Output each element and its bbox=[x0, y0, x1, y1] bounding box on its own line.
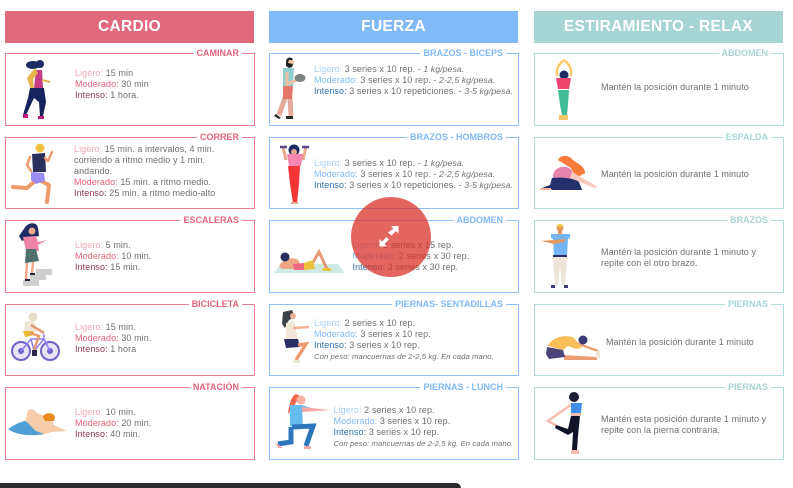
text: correr: Ligero: 15 min. a intervalos, 4 min. bbox=[74, 144, 214, 154]
column: estiramiento relax bbox=[534, 11, 784, 460]
text: piernas lunch: Intenso: 3 series x 10 rep. bbox=[334, 426, 439, 436]
text: natacion: Moderado: 20 min. bbox=[75, 418, 151, 428]
text: correr: Moderado: 15 min. a ritmo medio. bbox=[74, 176, 211, 186]
text: bicicleta bbox=[75, 322, 151, 354]
icon: woman with dumbbells bbox=[280, 144, 309, 204]
text: piernas relax 2: Mantén esta posición durante 1 minuto y bbox=[601, 414, 766, 424]
heading: fuerza bbox=[269, 11, 518, 43]
panel: correr bbox=[5, 137, 255, 209]
icon: cyclist bbox=[11, 312, 60, 361]
panel: brazos hombros bbox=[269, 137, 519, 209]
text: natacion: Ligero: 10 min. bbox=[75, 406, 136, 416]
text: piernas lunch: Con peso: mancuernas de 2-2,5 kg. En cada mano. bbox=[334, 438, 513, 448]
panel: abdomen relax bbox=[534, 53, 784, 126]
text: piernas sentadillas: Con peso: mancuernas de 2-2,5 kg. En cada mano. bbox=[314, 352, 494, 360]
panel: abdomen fuerza bbox=[269, 220, 519, 293]
panel: espalda bbox=[534, 137, 784, 209]
text: caminar: Intenso: 1 hora. bbox=[75, 90, 139, 100]
icon: man running bbox=[11, 144, 54, 204]
text: piernas relax 2: repite con la pierna contraria. bbox=[601, 424, 720, 434]
icon: woman walking bbox=[23, 60, 50, 119]
panel: natacion bbox=[5, 387, 255, 460]
label: natacion: NATACIÓN bbox=[193, 382, 239, 392]
text: piernas sentadillas: Intenso: 3 series x 10 rep. bbox=[314, 340, 420, 350]
text: piernas sentadillas: Moderado: 3 series x 10 rep. bbox=[314, 328, 431, 338]
icon: man stretching arm bbox=[541, 224, 570, 288]
text: abdomen fuerza: Ligero: 2 series x 15 rep. bbox=[352, 240, 454, 250]
icon: woman squatting bbox=[282, 310, 310, 363]
text: brazos relax bbox=[601, 246, 756, 268]
text: brazos biceps: Moderado: 3 series x 10 rep. - 2-2,5 kg/pesa. bbox=[314, 74, 495, 84]
text: brazos hombros: Intenso: 3 series x 10 repeticiones. - 3-5 kg/pesa. bbox=[314, 180, 513, 190]
text: caminar: Ligero: 15 min bbox=[75, 68, 133, 78]
heading: cardio: CARDIO bbox=[98, 18, 161, 35]
text: escaleras: Intenso: 15 min. bbox=[75, 262, 140, 272]
text: correr bbox=[74, 144, 215, 198]
panel: escaleras bbox=[5, 220, 255, 293]
text: bicicleta: Intenso: 1 hora bbox=[75, 344, 136, 354]
text: piernas lunch: Ligero: 2 series x 10 rep. bbox=[334, 404, 435, 414]
text: brazos hombros: Ligero: 3 series x 10 rep. - 1 kg/pesa. bbox=[314, 158, 464, 168]
text: brazos biceps bbox=[314, 64, 513, 96]
icon: woman lunging bbox=[275, 394, 330, 449]
icon: seated forward bend bbox=[546, 336, 600, 360]
text: natacion: Intenso: 40 min. bbox=[75, 428, 140, 438]
label: caminar: CAMINAR bbox=[196, 48, 239, 58]
label: escaleras: ESCALERAS bbox=[183, 215, 239, 225]
text: correr: corriendo a ritmo medio y 1 min. bbox=[74, 154, 205, 164]
icon: swimmer bbox=[8, 409, 67, 436]
heading: cardio bbox=[5, 11, 254, 43]
text: abdomen fuerza: Moderado: 2 series x 30 rep. bbox=[352, 250, 469, 260]
icon: woman on stairs bbox=[19, 223, 52, 286]
heading: estiramiento relax: ESTIRAMIENTO - RELAX bbox=[564, 18, 753, 35]
label: brazos biceps: BRAZOS - BICEPS bbox=[423, 48, 503, 58]
label: bicicleta: BICICLETA bbox=[192, 299, 239, 309]
label: piernas lunch: PIERNAS - LUNCH bbox=[423, 382, 503, 392]
text: escaleras: Ligero: 5 min. bbox=[75, 240, 131, 250]
text: abdomen fuerza: Intenso: 3 series x 30 rep. bbox=[352, 262, 458, 272]
text: espalda: Mantén la posición durante 1 minuto bbox=[601, 168, 749, 178]
panel: bicicleta bbox=[5, 304, 255, 376]
panel: brazos biceps bbox=[269, 53, 519, 126]
text: bicicleta: Moderado: 30 min. bbox=[75, 332, 151, 342]
panel: piernas sentadillas bbox=[269, 304, 519, 376]
label: abdomen relax: ABDOMEN bbox=[722, 48, 768, 58]
text: piernas sentadillas bbox=[314, 318, 494, 360]
bottom bar bbox=[0, 483, 461, 488]
column: fuerza bbox=[269, 11, 519, 460]
text: piernas lunch bbox=[334, 404, 513, 448]
panel: piernas relax 1 bbox=[534, 304, 784, 376]
icon: child pose bbox=[540, 156, 598, 190]
text: brazos hombros: Moderado: 3 series x 10 rep. - 2-2,5 kg/pesa. bbox=[314, 168, 495, 178]
panel: piernas relax 2 bbox=[534, 387, 784, 460]
label: correr: CORRER bbox=[200, 132, 239, 142]
text: brazos relax: repite con el otro brazo. bbox=[601, 258, 698, 268]
icon: man with weight bbox=[274, 58, 306, 119]
label: brazos relax: BRAZOS bbox=[730, 215, 768, 225]
panel: piernas lunch bbox=[269, 387, 519, 460]
text: abdomen fuerza bbox=[352, 240, 469, 272]
text: brazos biceps: Intenso: 3 series x 10 repeticiones. - 3-5 kg/pesa. bbox=[314, 86, 513, 96]
text: piernas sentadillas: Ligero: 2 series x 10 rep. bbox=[314, 318, 415, 328]
icon: standing leg stretch bbox=[546, 392, 582, 454]
text: brazos relax: Mantén la posición durante 1 minuto y bbox=[601, 246, 756, 256]
expand button bbox=[351, 197, 431, 277]
label: piernas relax 1: PIERNAS bbox=[728, 299, 768, 309]
text: escaleras bbox=[75, 240, 151, 272]
panel: brazos relax bbox=[534, 220, 784, 293]
text: brazos biceps: Ligero: 3 series x 10 rep. - 1 kg/pesa. bbox=[314, 64, 464, 74]
heading: fuerza: FUERZA bbox=[361, 18, 426, 35]
label: brazos hombros: BRAZOS - HOMBROS bbox=[410, 132, 503, 142]
text: caminar bbox=[75, 68, 149, 100]
text: piernas relax 2 bbox=[601, 414, 766, 435]
panel: caminar bbox=[5, 53, 255, 126]
icon: sit-ups bbox=[274, 248, 345, 273]
text: piernas relax 1: Mantén la posición durante 1 minuto bbox=[606, 337, 754, 347]
text: natacion bbox=[75, 406, 151, 438]
text: abdomen relax: Mantén la posición durante 1 minuto bbox=[601, 82, 749, 92]
text: bicicleta: Ligero: 15 min. bbox=[75, 322, 136, 332]
label: piernas sentadillas: PIERNAS- SENTADILLAS bbox=[395, 299, 503, 309]
label: espalda: ESPALDA bbox=[726, 132, 768, 142]
text: escaleras: Moderado: 10 min. bbox=[75, 250, 151, 260]
text: caminar: Moderado: 30 min bbox=[75, 78, 149, 88]
column: cardio bbox=[5, 11, 255, 460]
text: correr: Intenso: 25 min. a ritmo medio-alto bbox=[74, 188, 215, 198]
icon: woman arms raised bbox=[556, 59, 572, 120]
text: brazos hombros bbox=[314, 158, 513, 190]
label: abdomen fuerza: ABDOMEN bbox=[456, 215, 503, 225]
heading: estiramiento relax bbox=[534, 11, 783, 43]
text: piernas lunch: Moderado: 3 series x 10 rep. bbox=[334, 416, 450, 426]
text: correr: andando. bbox=[74, 166, 112, 176]
label: piernas relax 2: PIERNAS bbox=[728, 382, 768, 392]
